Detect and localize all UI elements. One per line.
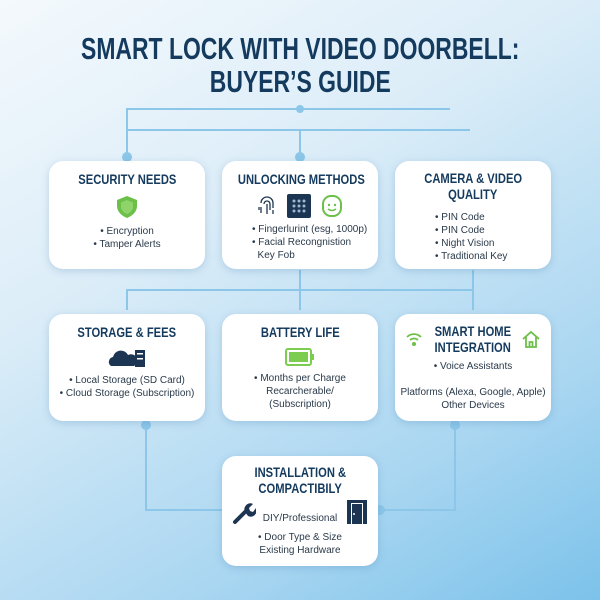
text: battery items: • Months per Charge [254, 373, 346, 384]
title: SMART LOCK WITH VIDEO DOORBELL: [81, 31, 519, 66]
icon: door [347, 500, 367, 524]
text: camera items [435, 212, 508, 262]
panel: storage & fees [49, 314, 205, 421]
panel: camera & video quality [395, 161, 551, 269]
heading: camera: CAMERA & VIDEO [424, 170, 522, 186]
icon: shield [117, 196, 137, 218]
heading: camera: QUALITY [448, 186, 498, 202]
text: storage items: • Local Storage (SD Card) [69, 375, 185, 386]
text: smart home items: • Voice Assistants [434, 361, 512, 372]
text: battery items: Recarcherable/ [266, 386, 334, 397]
panel: security needs [49, 161, 205, 269]
heading: storage: STORAGE & FEES [78, 324, 176, 340]
icon: cloud and drive [108, 350, 145, 367]
heading: installation [254, 464, 346, 496]
text: camera items: • PIN Code [435, 225, 485, 236]
icon: house [522, 330, 540, 348]
heading: smart home: INTEGRATION [435, 339, 511, 355]
icon: wrench [232, 503, 256, 524]
heading: smart home [435, 323, 511, 355]
panel: smart home integration: Other Devices [441, 400, 505, 411]
title: BUYER’S GUIDE [209, 64, 390, 99]
panel: installation & compatibility [222, 456, 378, 566]
panel: installation & compatibility: • Door Type & Size [258, 532, 342, 543]
text: battery items [254, 373, 346, 410]
text: camera items: • Traditional Key [435, 251, 507, 262]
text: unlocking items: • Facial Recongnistion [252, 237, 351, 248]
text: installation items: DIY/Professional [263, 513, 337, 524]
heading: battery: BATTERY LIFE [261, 324, 339, 340]
heading: installation: COMPACTIBILY [258, 480, 342, 496]
panel: battery life [222, 314, 378, 421]
panel: smart home integration [395, 314, 551, 421]
panel: unlocking methods [222, 161, 378, 269]
heading: installation: INSTALLATION & [254, 464, 346, 480]
text: security items: • Encryption [100, 226, 154, 237]
text: battery items: (Subscription) [269, 399, 331, 410]
panel: installation & compatibility: Existing Hardware [259, 545, 341, 556]
heading: camera [424, 170, 522, 202]
title [81, 31, 519, 99]
text: unlocking items: • Fingerlurint (esg, 1000p) [252, 224, 367, 235]
icon: battery [285, 348, 314, 366]
panel: smart home integration: Platforms (Alexa, Google, Apple) [400, 387, 546, 398]
text: storage items: • Cloud Storage (Subscription) [60, 388, 194, 399]
text: camera items: • Night Vision [435, 238, 494, 249]
text: security items [93, 226, 161, 250]
heading: security needs: SECURITY NEEDS [78, 171, 176, 187]
text: storage items [60, 375, 194, 399]
heading: smart home: SMART HOME [435, 323, 511, 339]
heading: unlocking methods: UNLOCKING METHODS [238, 171, 365, 187]
icon: wifi [406, 333, 422, 346]
text: camera items: • PIN Code [435, 212, 485, 223]
icons: fingerprint keypad face [258, 194, 342, 218]
text: unlocking items: Key Fob [258, 250, 295, 261]
text: unlocking items [252, 224, 367, 261]
text: security items: • Tamper Alerts [93, 239, 161, 250]
